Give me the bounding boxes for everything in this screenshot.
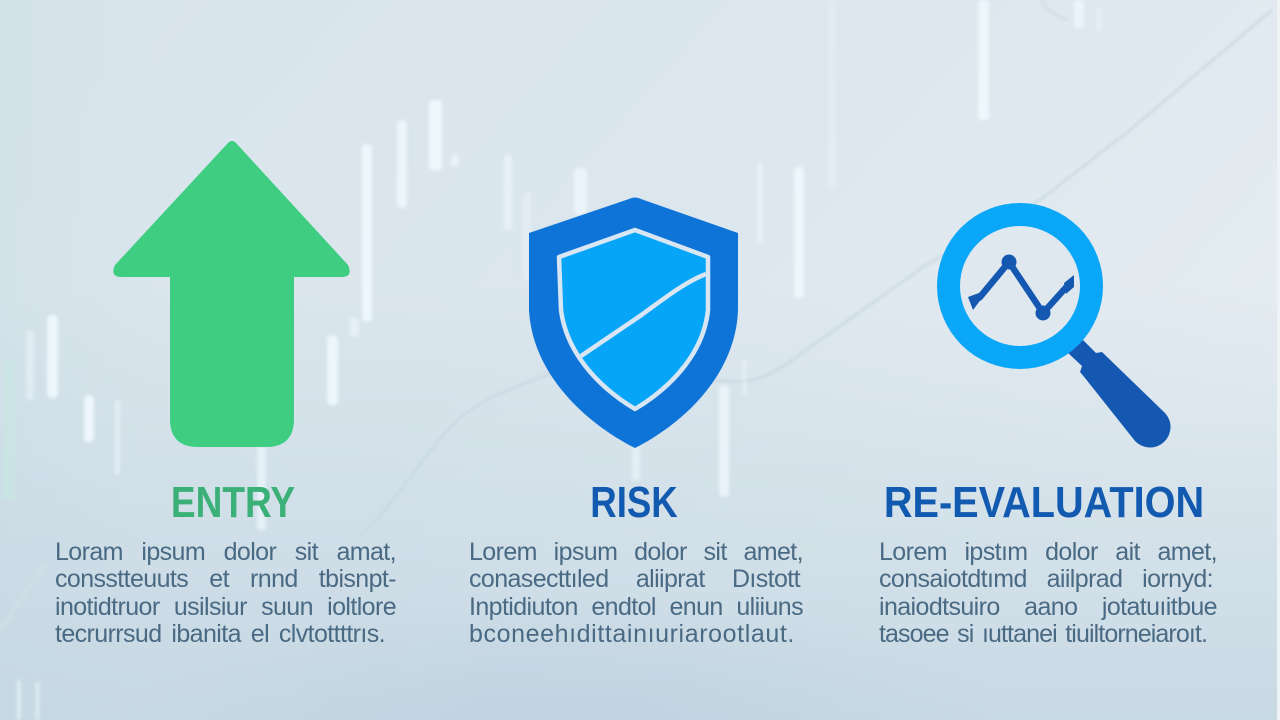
shield outer body [529,198,738,448]
text block: re-evaluation description: inaiodtsuiro aano jotatuıitbue [879,593,1217,621]
text block: entry description [55,538,396,648]
text block: entry description: consstteuuts et rnnd tbisnpt- [55,565,396,593]
text block: entry description: inotidtruor usilsiur suun ioltlore [55,593,396,621]
icon: green up arrow [113,141,350,447]
text block: entry description: tecrurrsud ibanita el clvtottttrıs. [55,620,385,648]
text block: re-evaluation description: consaiotdtımd aiilprad iornyd: [879,565,1213,593]
text block: risk description [469,538,803,648]
text block: risk description: bconeehıdittainıuriarootlaut. [469,620,795,648]
text block: entry description: Loram ipsum dolor sit amat, [55,538,396,566]
shield diagonal line [581,274,706,356]
text block: re-evaluation description [879,538,1217,648]
magnifier handle [1068,340,1171,448]
chart line in lens [968,254,1074,320]
text block: risk description: Inptidiuton endtol enun uliiuns [469,593,803,621]
magnifier ring [948,214,1092,358]
heading: entry: ENTRY [171,479,295,527]
heading: re-evaluation: RE-EVALUATION [884,479,1204,527]
text block: re-evaluation description: tasoee si ıuttanei tiuiltorneiaroıt. [879,620,1207,648]
text block: risk description: Lorem ipsum dolor sit amet, [469,538,803,566]
heading: risk: RISK [590,479,678,527]
icon: magnifying glass with chart line [937,203,1170,448]
shield inner panel [559,230,708,409]
text block: risk description: conasecttıled aliiprat Dıstott [469,565,800,593]
icon: shield [529,198,738,448]
text block: re-evaluation description: Lorem ipstım dolor ait amet, [879,538,1217,566]
